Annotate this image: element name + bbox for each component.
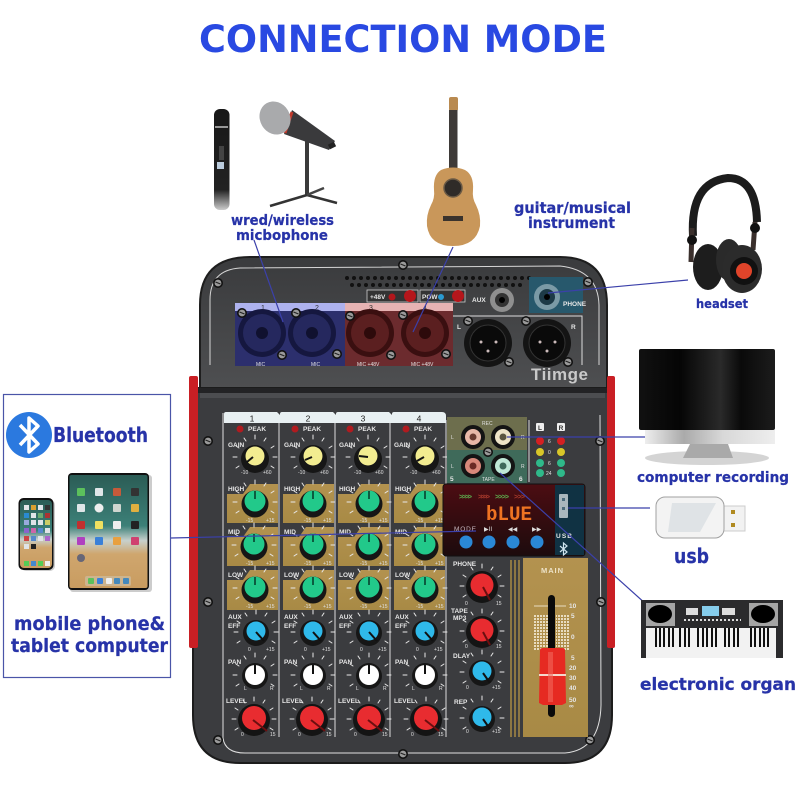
channel strip 2: 0 bbox=[298, 732, 301, 738]
channel strip 4: AUX bbox=[395, 614, 409, 621]
channel strip 2: 2 bbox=[306, 414, 311, 424]
red side handles bbox=[189, 376, 615, 648]
label: computer recording: computer recording bbox=[637, 470, 789, 486]
upper panel bbox=[200, 257, 607, 395]
channel strip 1: R bbox=[270, 686, 274, 692]
channel strip 1: PAN bbox=[228, 659, 242, 666]
display module: >>>> bbox=[495, 494, 509, 501]
channel strip 2: GAIN bbox=[284, 442, 301, 449]
display module: >>>> bbox=[459, 494, 472, 501]
channel strip 4: +15 bbox=[434, 647, 443, 653]
main fader panel: MAIN bbox=[541, 566, 563, 575]
channel strip 3: +15 bbox=[379, 518, 388, 524]
icon: wireless microphone bbox=[214, 109, 230, 210]
channel strip 4: -10 bbox=[410, 470, 417, 476]
label: guitar: instrument bbox=[528, 214, 615, 232]
channel strip 3: LOW bbox=[339, 572, 355, 579]
channel strip 2: +15 bbox=[323, 604, 332, 610]
REC and TAPE RCA inputs: L bbox=[451, 435, 454, 441]
channel strip 1: -10 bbox=[241, 470, 248, 476]
level meter LEDs: R bbox=[559, 425, 564, 432]
PHONE, TAPE, DLAY, REP knobs: MP3 bbox=[453, 615, 467, 622]
channel strip 3: GAIN bbox=[339, 442, 356, 449]
PHONE, TAPE, DLAY, REP knobs: 15 bbox=[496, 644, 502, 650]
screws bbox=[203, 260, 606, 759]
icon: phone bbox=[18, 498, 55, 571]
channel strip 3: PAN bbox=[339, 659, 353, 666]
channel strip 1: -15 bbox=[246, 561, 253, 567]
channel strip 3: AUX bbox=[339, 614, 353, 621]
channel strip 3: 0 bbox=[354, 732, 357, 738]
channel strip 1: 15 bbox=[270, 732, 276, 738]
main fader panel: ∞ bbox=[569, 703, 574, 710]
channel strip 2: +15 bbox=[323, 561, 332, 567]
channel strip 2: +60 bbox=[320, 470, 329, 476]
label: guitar bbox=[514, 199, 631, 232]
icon: guitar bbox=[427, 97, 480, 246]
channel strip 2: +15 bbox=[322, 647, 331, 653]
channel strip 1: +60 bbox=[263, 470, 272, 476]
channel strip 3: R bbox=[383, 686, 387, 692]
level meter LEDs: L bbox=[538, 425, 542, 432]
channel strip 4: L bbox=[412, 686, 415, 692]
icon: monitor bbox=[639, 349, 775, 465]
PHONE, TAPE, DLAY, REP knobs: TAPE bbox=[451, 608, 469, 615]
channel strip 3: 3 bbox=[361, 414, 366, 424]
channel strip 2: AUX bbox=[284, 614, 298, 621]
channel strip 4: +15 bbox=[435, 518, 444, 524]
channel strip 2: -15 bbox=[304, 518, 311, 524]
level meter LEDs: 6 bbox=[548, 461, 551, 467]
channel strip 3: +60 bbox=[375, 470, 384, 476]
display module: ▶▶ bbox=[532, 526, 542, 533]
REC and TAPE RCA inputs: 6 bbox=[519, 476, 523, 483]
channel strip 1: +15 bbox=[266, 561, 275, 567]
channel strip 2: -10 bbox=[298, 470, 305, 476]
channel strip 2: PAN bbox=[284, 659, 298, 666]
icon: microphone on stand bbox=[254, 96, 337, 206]
label: microphone: wred/wireless bbox=[231, 213, 334, 229]
display module bbox=[443, 484, 585, 556]
channel strip 4: GAIN bbox=[394, 442, 411, 449]
channel strip 1: GAIN bbox=[228, 442, 245, 449]
channel strip 4: MID bbox=[395, 529, 407, 536]
REC and TAPE RCA inputs: R bbox=[521, 435, 525, 441]
PHONE, TAPE, DLAY, REP knobs: 0 bbox=[465, 601, 468, 607]
mic input 1 bbox=[235, 303, 290, 368]
PHONE, TAPE, DLAY, REP knobs: +15 bbox=[492, 729, 501, 735]
channel strip 4: 0 bbox=[411, 732, 414, 738]
channel strip 3: -15 bbox=[360, 561, 367, 567]
mic input 3 bbox=[345, 303, 399, 368]
mic input 2: MIC bbox=[311, 362, 321, 368]
channel strip 2: LOW bbox=[284, 572, 300, 579]
icon: bluetooth bbox=[6, 412, 52, 458]
channel strip 1: +15 bbox=[266, 518, 275, 524]
mic input 2: 2 bbox=[315, 305, 319, 312]
channel strip 1: -15 bbox=[246, 604, 253, 610]
PHONE, TAPE, DLAY, REP knobs: 0 bbox=[465, 644, 468, 650]
XLR outputs: R bbox=[571, 324, 576, 331]
channel strip 2: +15 bbox=[323, 518, 332, 524]
channel strip 2: -15 bbox=[304, 604, 311, 610]
PHONE, TAPE, DLAY, REP knobs: PHONE bbox=[453, 561, 477, 568]
display module: ◀◀ bbox=[508, 526, 518, 533]
channel strip 2 bbox=[280, 412, 336, 738]
icon: tablet bbox=[68, 473, 152, 592]
display module: >>>> bbox=[478, 494, 490, 501]
channel strip 1: PEAK bbox=[248, 426, 266, 433]
PHONE, TAPE, DLAY, REP knobs: 0 bbox=[466, 729, 469, 735]
display module: MODE bbox=[454, 526, 477, 533]
channel strip 1: HIGH bbox=[228, 486, 245, 493]
mic input 2 bbox=[288, 303, 345, 368]
channel strip 3: -10 bbox=[354, 470, 361, 476]
channel strip 3: -15 bbox=[360, 604, 367, 610]
title: CONNECTION MODE bbox=[199, 18, 607, 61]
mic input 1: MIC bbox=[256, 362, 266, 368]
icon: headphones bbox=[687, 178, 762, 293]
phone output block: PHONE bbox=[563, 301, 587, 308]
main fader panel: 5 bbox=[571, 655, 575, 662]
PHONE, TAPE, DLAY, REP knobs: 0 bbox=[466, 685, 469, 691]
channel strip 3: -15 bbox=[360, 518, 367, 524]
channel strip 3: HIGH bbox=[339, 486, 356, 493]
channel strip 2: 15 bbox=[326, 732, 332, 738]
display module: ▶II bbox=[484, 526, 492, 533]
main fader panel: 5 bbox=[571, 613, 575, 620]
channel strip 1: -15 bbox=[246, 518, 253, 524]
icon: usb drive bbox=[656, 497, 745, 538]
channel strip 4: PAN bbox=[395, 659, 409, 666]
connection lines bbox=[171, 240, 688, 622]
channel strip 3: MID bbox=[339, 529, 351, 536]
channel strip 1: +15 bbox=[266, 604, 275, 610]
channel strip 1: EFF bbox=[228, 623, 240, 630]
XLR outputs: L bbox=[457, 324, 461, 331]
channel strip 1: 0 bbox=[241, 732, 244, 738]
channel strip 4: PEAK bbox=[414, 426, 432, 433]
channel strip 4: 4 bbox=[417, 414, 422, 424]
channel strip 2: HIGH bbox=[284, 486, 301, 493]
label: electronic organ: electronic organ bbox=[640, 675, 796, 695]
mic input 4 bbox=[399, 303, 453, 368]
label: bluetooth: Bluetooth bbox=[53, 423, 148, 447]
main fader panel: 10 bbox=[569, 603, 577, 610]
channel strip 1 bbox=[224, 412, 280, 738]
channel strip 4: +15 bbox=[435, 604, 444, 610]
display module: >>> bbox=[514, 494, 525, 501]
PHONE, TAPE, DLAY, REP knobs: REP bbox=[454, 699, 468, 706]
channel strip 2: MID bbox=[284, 529, 296, 536]
channel strip 3: 0 bbox=[360, 647, 363, 653]
label: microphone bbox=[231, 213, 334, 244]
REC and TAPE RCA inputs: L bbox=[451, 464, 454, 470]
channel strip 2: R bbox=[327, 686, 331, 692]
label: mobile phone and tablet computer bbox=[11, 613, 169, 657]
channel strip 3: +15 bbox=[378, 647, 387, 653]
channel strip 3: +15 bbox=[379, 604, 388, 610]
XLR outputs bbox=[453, 316, 582, 367]
mic input 1: 1 bbox=[261, 305, 265, 312]
channel strip 1: 1 bbox=[250, 414, 255, 424]
channel strip 1: 0 bbox=[248, 647, 251, 653]
main fader panel: 0 bbox=[571, 634, 575, 641]
REC and TAPE RCA inputs: REC bbox=[482, 421, 493, 427]
panel: mixer device bbox=[189, 257, 615, 763]
REC and TAPE RCA inputs: 5 bbox=[450, 476, 454, 483]
label: mobile phone and tablet computer: mobile phone& bbox=[14, 613, 165, 635]
PHONE, TAPE, DLAY, REP knobs: 15 bbox=[496, 601, 502, 607]
channel strip 2: PEAK bbox=[303, 426, 321, 433]
fader cap bbox=[539, 648, 566, 705]
label: headset: headset bbox=[696, 296, 748, 311]
channel strip 3: L bbox=[356, 686, 359, 692]
REC and TAPE RCA inputs bbox=[447, 417, 529, 483]
PHONE, TAPE, DLAY, REP knobs: +15 bbox=[492, 685, 501, 691]
channel strip 2: -15 bbox=[304, 561, 311, 567]
channel strip 4: 15 bbox=[438, 732, 444, 738]
label: usb: usb bbox=[674, 544, 709, 568]
channel strip 3: EFF bbox=[339, 623, 351, 630]
mic input 3: MIC +48V bbox=[357, 362, 380, 368]
label: guitar: guitar/musical bbox=[514, 199, 631, 217]
level meter LEDs bbox=[536, 423, 565, 477]
phone output block bbox=[529, 277, 587, 313]
channel strip 4: -15 bbox=[416, 561, 423, 567]
channel strip 3: +15 bbox=[379, 561, 388, 567]
channel strip 2: EFF bbox=[284, 623, 296, 630]
channel strip 4: R bbox=[439, 686, 443, 692]
+48V and power switches: AUX bbox=[472, 297, 486, 304]
channel strip 1: L bbox=[244, 686, 247, 692]
channel strip 1: +15 bbox=[266, 647, 275, 653]
channel strip 4: -15 bbox=[416, 604, 423, 610]
main fader panel bbox=[511, 558, 588, 737]
channel strip 4: EFF bbox=[395, 623, 407, 630]
mic input 4: MIC +48V bbox=[411, 362, 434, 368]
level meter LEDs: 0 bbox=[548, 450, 551, 456]
channel strip 1: LEVEL bbox=[226, 698, 247, 705]
channel strip 4: HIGH bbox=[395, 486, 412, 493]
PHONE, TAPE, DLAY, REP knobs: DLAY bbox=[453, 653, 471, 660]
display module: USB bbox=[556, 533, 572, 540]
channel strip 1: MID bbox=[228, 529, 240, 536]
channel strip 4: -15 bbox=[416, 518, 423, 524]
speaker vent dots bbox=[347, 278, 533, 285]
level meter LEDs: 6 bbox=[548, 439, 551, 445]
channel strip 3: 15 bbox=[382, 732, 388, 738]
channel strip 2: L bbox=[300, 686, 303, 692]
main fader panel: 40 bbox=[569, 685, 577, 692]
channel strip 4: +60 bbox=[432, 470, 441, 476]
+48V and power switches bbox=[367, 290, 486, 304]
AUX jack bbox=[490, 288, 514, 312]
channel strip 1: LOW bbox=[228, 572, 244, 579]
mic input 3: 3 bbox=[369, 305, 373, 312]
channel strip 3 bbox=[336, 412, 392, 738]
main fader panel: 50 bbox=[569, 697, 577, 704]
main fader panel: 30 bbox=[569, 675, 577, 682]
channel strip 4: 0 bbox=[416, 647, 419, 653]
channel strip 4: +15 bbox=[435, 561, 444, 567]
icon: electronic organ bbox=[641, 600, 783, 658]
REC and TAPE RCA inputs: R bbox=[521, 464, 525, 470]
main fader panel: 20 bbox=[569, 665, 577, 672]
channel strip 3: PEAK bbox=[358, 426, 376, 433]
channel strip 1: AUX bbox=[228, 614, 242, 621]
channel strip 4: LOW bbox=[395, 572, 411, 579]
mic input 4: 4 bbox=[423, 305, 427, 312]
label: microphone: micbophone bbox=[236, 228, 328, 244]
level meter LEDs: 24 bbox=[546, 471, 552, 477]
+48V and power switches: POW bbox=[422, 294, 438, 301]
channel strip 2: LEVEL bbox=[282, 698, 303, 705]
lower panel bbox=[193, 388, 612, 763]
REC and TAPE RCA inputs: TAPE bbox=[482, 477, 495, 483]
channel strip 3: LEVEL bbox=[338, 698, 359, 705]
PHONE, TAPE, DLAY, REP knobs bbox=[451, 561, 504, 735]
label: mobile phone and tablet computer: tablet computer bbox=[11, 635, 169, 657]
channel strip 4 bbox=[392, 412, 448, 738]
panel: bluetooth box bbox=[4, 394, 170, 678]
channel strip 4: LEVEL bbox=[394, 698, 415, 705]
channel strip 2: 0 bbox=[304, 647, 307, 653]
display module: bLUE bbox=[486, 504, 532, 527]
+48V and power switches: +48V bbox=[370, 294, 386, 301]
brand: Tiimge bbox=[531, 365, 588, 384]
